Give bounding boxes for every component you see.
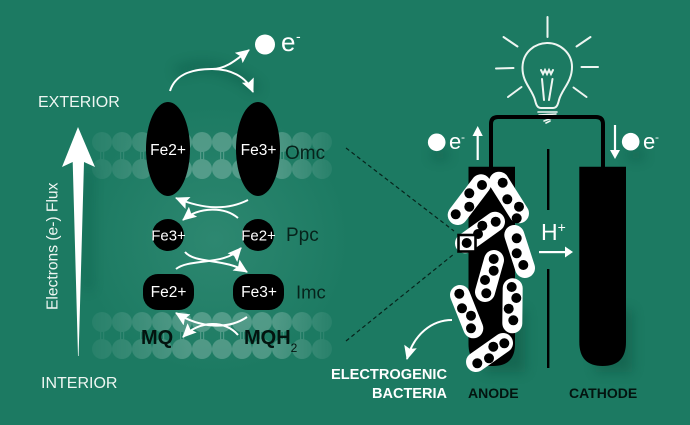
label: ppc: Ppc (286, 225, 319, 246)
complex: imc: Fe3+ (241, 284, 277, 301)
anode (468, 167, 515, 366)
label: electrogenic bacteria (331, 367, 448, 402)
label: proton: + (558, 219, 566, 235)
arrows: ppc to omc (176, 198, 248, 220)
label: cathode: CATHODE (569, 385, 637, 401)
label: electrogenic bacteria: ELECTROGENIC (331, 367, 447, 383)
separator membrane (547, 149, 549, 368)
cathode (579, 167, 626, 366)
complex: omc (146, 102, 280, 196)
light bulb (496, 17, 598, 123)
label: mqh2: MQH (244, 327, 291, 349)
electron: anode side: e (449, 129, 461, 154)
arrow: electron up (472, 126, 483, 160)
arrow: electron down (610, 125, 620, 159)
electron top (255, 27, 301, 57)
complex: ppc: Fe2+ (241, 228, 276, 244)
electron: cathode side: - (655, 130, 659, 144)
label: electrons flux: Electrons (e-) Flux (44, 182, 62, 310)
dashed zoom lines (346, 148, 454, 341)
electron top: e (281, 27, 295, 57)
complex: ppc: Fe3+ (151, 228, 186, 244)
label: exterior: EXTERIOR (38, 94, 120, 111)
zoom square (458, 235, 476, 252)
complex: imc: Fe2+ (151, 284, 186, 301)
electron: cathode side: e (643, 129, 655, 154)
complex: omc: Fe3+ (241, 142, 276, 159)
label: imc: Imc (296, 282, 326, 302)
electron: anode side: - (461, 130, 465, 144)
arrows: mqh2 to mq (176, 313, 247, 337)
cell membranes (92, 130, 332, 361)
wire (491, 117, 603, 168)
arrows: omc to electron (170, 50, 253, 92)
label: anode: ANODE (468, 385, 519, 401)
electron top: - (296, 28, 301, 44)
label: electrogenic bacteria: BACTERIA (372, 386, 448, 402)
label: omc: Omc (285, 143, 325, 164)
label: interior: INTERIOR (41, 375, 117, 392)
big arrow: electron flux (62, 127, 95, 356)
arrow: proton (539, 246, 573, 258)
complex: omc: Fe2+ (150, 142, 186, 159)
electron: anode side (428, 129, 465, 154)
arrow: bacteria callout (407, 320, 452, 359)
label: mq: MQ (141, 327, 173, 349)
soft shadows (84, 66, 645, 372)
bacteria (451, 178, 528, 368)
arrows: imc to ppc (176, 248, 247, 272)
electron: cathode side (622, 129, 659, 154)
label: mqh2: 2 (291, 341, 298, 355)
complex: ppc (151, 219, 276, 251)
complex: imc (143, 274, 284, 310)
label: proton: H (541, 219, 558, 245)
